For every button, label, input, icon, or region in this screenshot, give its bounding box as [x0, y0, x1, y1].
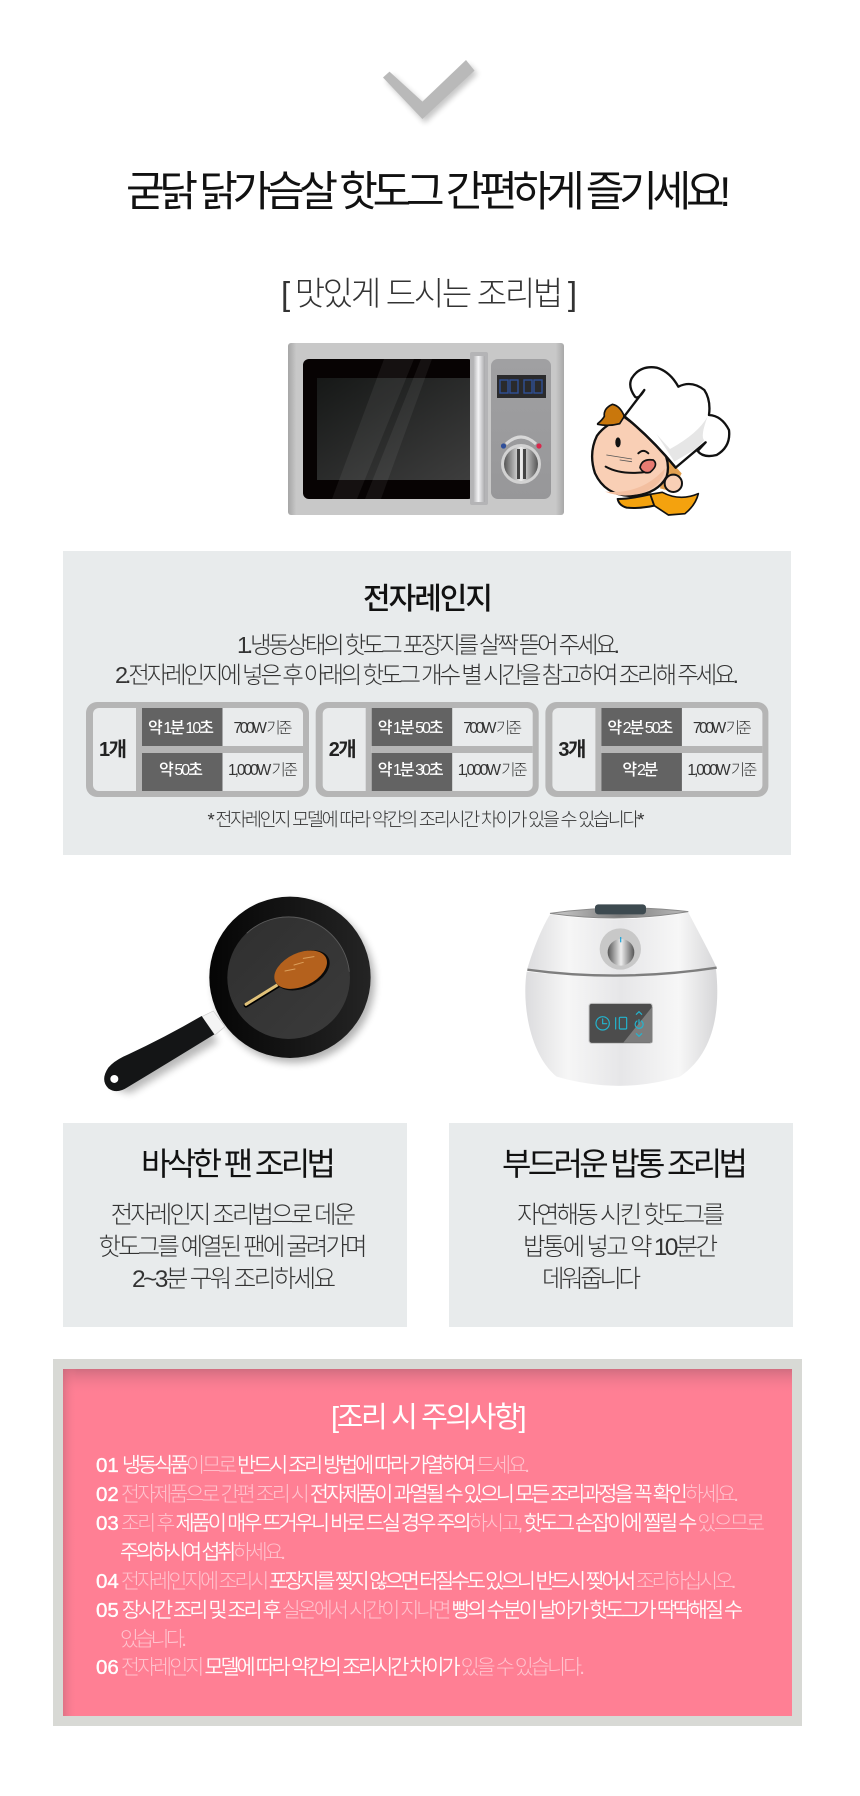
text: caution list: 06: [96, 1656, 119, 1679]
heading: rice cooker recipe: 부드러운 밥통 조리법: [502, 1146, 748, 1182]
card: one piece times: 700W 기준: [234, 719, 292, 737]
text: caution list: 있습니다.: [120, 1628, 187, 1651]
card: one piece times: 약 50초: [159, 761, 203, 779]
text: rice cooker recipe body: 데워줍니다: [542, 1265, 641, 1293]
text: pan recipe body: 전자레인지 조리법으로 데운: [111, 1201, 356, 1229]
card: one piece times: 약 1분 10초: [148, 719, 214, 737]
text: pan recipe body: 핫도그를 예열된 팬에 굴려가며: [98, 1233, 368, 1261]
text: caution list: [96, 1454, 765, 1679]
card: one piece times: 1개: [99, 738, 127, 761]
icon: chef character: [592, 367, 729, 515]
text: microwave step 1: 1.냉동상태의 핫도그 포장지를 살짝 뜯어 주세요.: [237, 632, 620, 658]
panel: rice cooker recipe: [449, 1123, 793, 1327]
text: caution list: 주의하시여 섭취하세요.: [120, 1541, 286, 1564]
text: caution list: 전자레인지 모델에 따라 약간의 조리시간 차이가 있을 수 있습니다.: [121, 1656, 585, 1679]
footnote: * 전자레인지 모델에 따라 약간의 조리시간 차이가 있을 수 있습니다*: [208, 809, 644, 830]
text: pan recipe body: [98, 1201, 368, 1293]
text: pan recipe body: 2~3분 구워 조리하세요: [132, 1265, 336, 1293]
text: caution list: 전자제품으로 간편 조리 시 전자제품이 과열될 수 있으니 모든 조리과정을 꼭 확인하세요.: [121, 1483, 739, 1506]
text: caution list: 05: [96, 1599, 119, 1622]
heading: microwave: 전자레인지: [363, 583, 493, 616]
text: caution list: 02: [96, 1483, 119, 1506]
text: caution list: 01: [96, 1454, 119, 1477]
card: three pieces times: [545, 702, 768, 797]
text: caution list: 03: [96, 1512, 119, 1535]
text: microwave step 2: 2.전자레인지에 넣은 후 아래의 핫도그 개수 별 시간을 참고하여 조리해 주세요.: [115, 662, 739, 688]
card: three pieces times: 약 2분 50초: [607, 719, 673, 737]
card: three pieces times: 1,000W 기준: [687, 761, 757, 779]
card: one piece times: [86, 702, 309, 797]
panel: pan recipe: [63, 1123, 407, 1327]
heading: cautions: [조리 시 주의사항]: [331, 1402, 526, 1434]
card: two pieces times: 1,000W 기준: [458, 761, 528, 779]
card: three pieces times: 700W 기준: [693, 719, 752, 737]
icon: check mark: [383, 60, 478, 123]
card: two pieces times: 약 1분 50초: [378, 719, 444, 737]
text: rice cooker recipe body: 밥통에 넣고 약 10분간: [523, 1234, 718, 1261]
card: two pieces times: [316, 702, 539, 797]
panel: cooking cautions: [53, 1359, 802, 1726]
text: rice cooker recipe body: 자연해동 시킨 핫도그를: [517, 1202, 725, 1229]
text: caution list: 냉동식품이므로 반드시 조리 방법에 따라 가열하여 드세요.: [122, 1454, 530, 1477]
card: three pieces times: 약 2분: [622, 761, 658, 779]
text: caution list: 04: [96, 1570, 119, 1593]
card: two pieces times: 2개: [329, 738, 357, 761]
heading: pan recipe: 바삭한 팬 조리법: [141, 1146, 336, 1182]
text: caution list: 조리 후 제품이 매우 뜨거우니 바로 드실 경우 주의하시고, 핫도그 손잡이에 찔릴 수 있으므로: [121, 1512, 765, 1535]
card: one piece times: 1,000W 기준: [228, 761, 298, 779]
icon: frying pan with corn dog: [104, 897, 375, 1093]
card: three pieces times: 3개: [558, 738, 586, 761]
card: two pieces times: 약 1분 30초: [378, 761, 444, 779]
text: caution list: 전자레인지에 조리시 포장지를 찢지 않으면 터질수도 있으니 반드시 찢어서 조리하십시오.: [121, 1570, 736, 1593]
text: rice cooker recipe body: [517, 1202, 725, 1293]
card: two pieces times: 700W 기준: [463, 719, 522, 737]
text: caution list: 장시간 조리 및 조리 후 실온에서 시간이 지나면 빵의 수분이 날아가 핫도그가 딱딱해질 수: [122, 1599, 743, 1622]
icon: rice cooker: [525, 904, 717, 1086]
panel: microwave instructions: [63, 551, 791, 855]
title: 굳닭 닭가슴살 핫도그 간편하게 즐기세요!: [126, 168, 731, 215]
subtitle: [ 맛있게 드시는 조리법 ]: [281, 275, 577, 312]
icon: microwave: [288, 343, 564, 515]
